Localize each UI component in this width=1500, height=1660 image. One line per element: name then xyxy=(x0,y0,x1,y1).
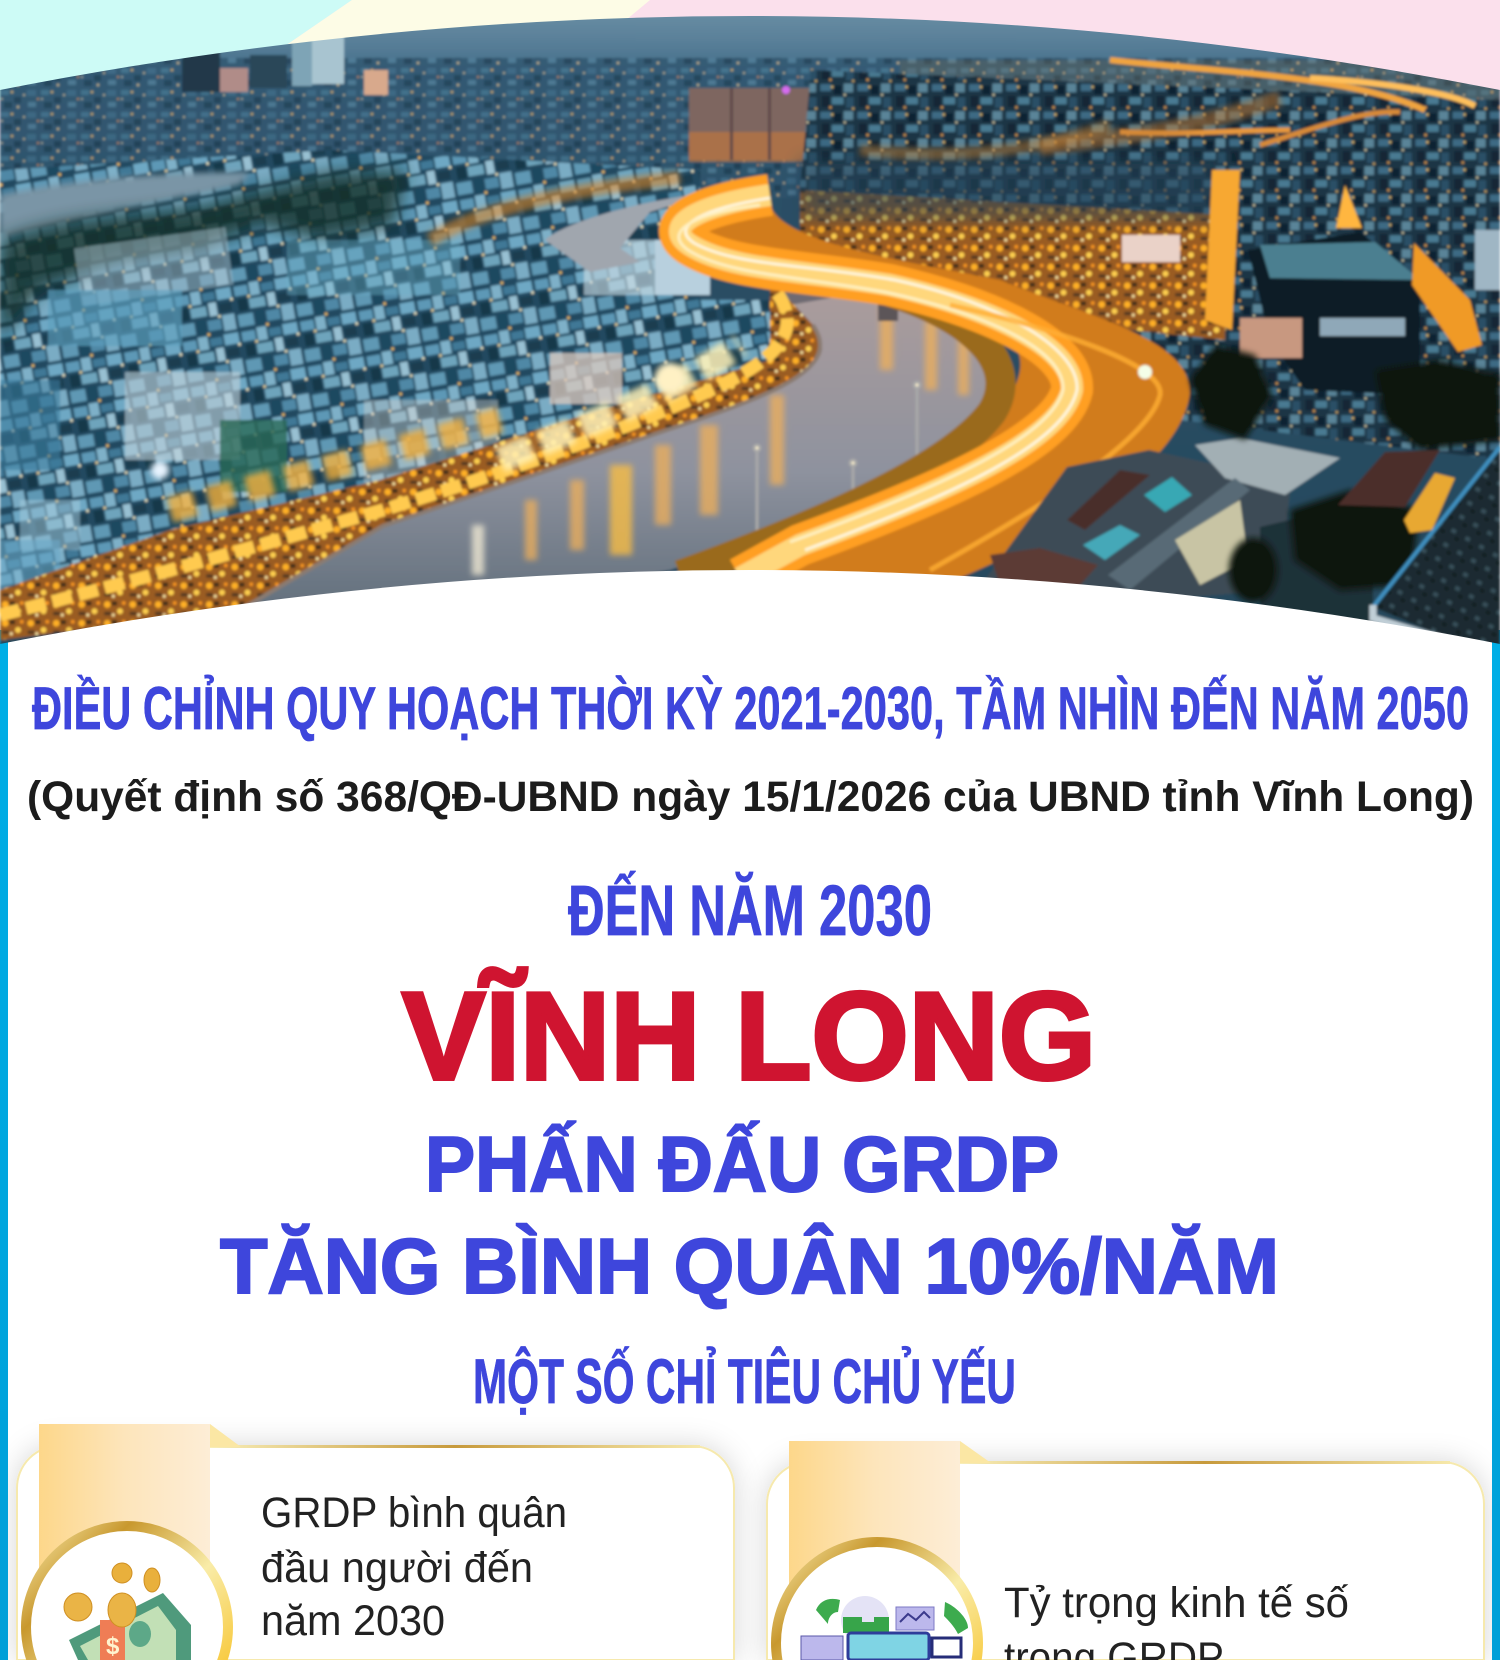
upper river reach xyxy=(545,192,715,295)
main title: Vinh Long: VĨNH LONG xyxy=(402,968,1096,1106)
card text: GRDP bình quân xyxy=(261,1489,567,1537)
sky and distant city xyxy=(0,0,1500,660)
hero photo: night view of the city and river xyxy=(0,0,1500,660)
section heading: key targets: MỘT SỐ CHỈ TIÊU CHỦ YẾU xyxy=(473,1346,1016,1417)
glowing curved highway xyxy=(676,195,1190,580)
white page body with blue side bars xyxy=(0,560,1500,1660)
bottom right rooftops xyxy=(985,438,1340,600)
icon: laptop and charts xyxy=(776,1542,978,1660)
card: GRDP per capita xyxy=(17,1424,734,1660)
right corner dark roof xyxy=(1338,447,1500,660)
card text: năm 2030 xyxy=(261,1597,445,1645)
blue side bars above card shadows xyxy=(0,644,1500,1660)
icon: money and coins xyxy=(26,1526,228,1660)
bridge xyxy=(770,250,900,321)
dark trees and ground xyxy=(1190,345,1500,640)
right district xyxy=(800,70,1500,460)
skyline towers xyxy=(182,36,388,95)
card: digital economy share xyxy=(767,1441,1484,1660)
headline line 2: TĂNG BÌNH QUÂN 10%/NĂM xyxy=(220,1222,1279,1310)
icon: money and coins: $ xyxy=(106,1633,120,1660)
heading: by 2030: ĐẾN NĂM 2030 xyxy=(568,872,932,951)
streetlights xyxy=(752,380,921,531)
headline line 1: PHẤN ĐẤU GRDP xyxy=(425,1120,1059,1208)
subheading: decision reference: (Quyết định số 368/QĐ-UBND ngày 15/1/2026 của UBND tỉnh Vĩnh Long) xyxy=(27,773,1474,821)
pastel top background xyxy=(0,0,1500,140)
card text: đầu người đến xyxy=(261,1544,533,1592)
upper right light trail xyxy=(430,60,1475,240)
main river xyxy=(256,296,988,602)
gold ribbon xyxy=(789,1441,990,1584)
river-side promenade xyxy=(0,280,822,640)
card text xyxy=(262,1496,564,1636)
gold ribbon xyxy=(39,1424,240,1568)
card panel xyxy=(767,1462,1484,1660)
card panel xyxy=(17,1446,734,1660)
left residential district xyxy=(0,148,772,592)
card text xyxy=(1004,1579,1349,1660)
card text: Tỷ trọng kinh tế số xyxy=(1004,1579,1349,1627)
central high-rise block xyxy=(689,86,811,162)
